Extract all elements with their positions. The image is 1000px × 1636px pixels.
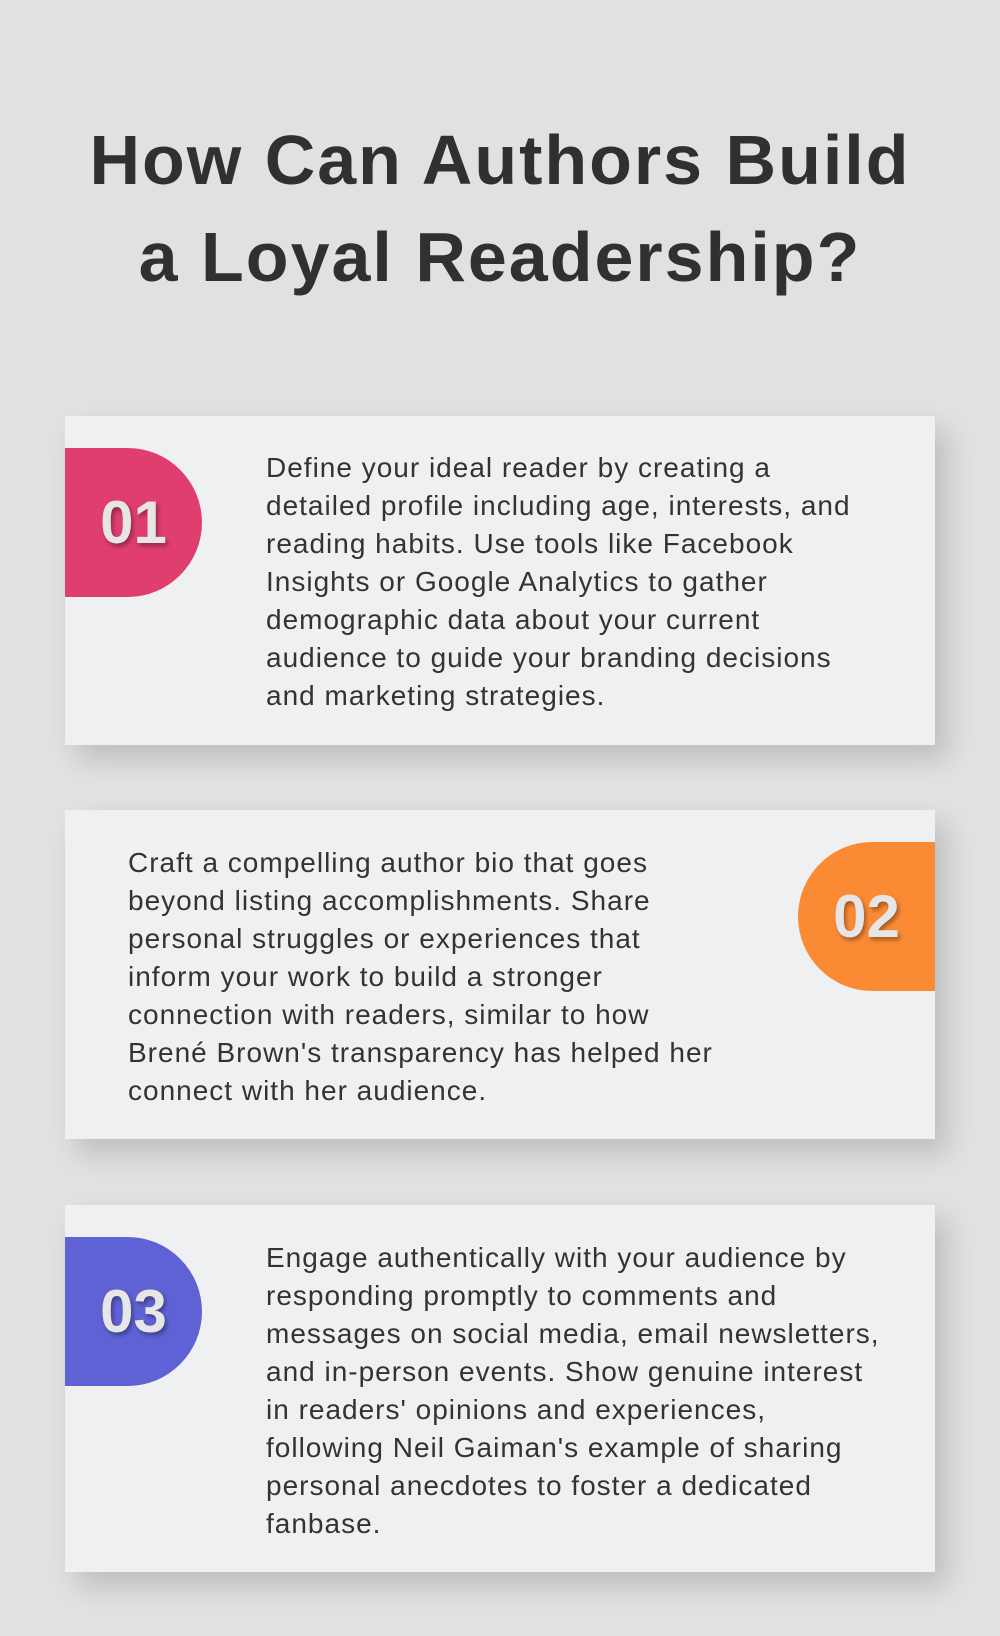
text: step 1: demographic data about your current [266,604,760,635]
text: step 3: messages on social media, email newsletters, [266,1318,880,1349]
text: step 1: Insights or Google Analytics to gather [266,566,768,597]
text: step 3: Engage authentically with your audience by [266,1242,847,1273]
panel: step 3 [65,1205,935,1572]
text: step 3: following Neil Gaiman's example of sharing [266,1432,842,1463]
text: step 2: Craft a compelling author bio that goes [128,847,648,878]
text: step 3: personal anecdotes to foster a dedicated [266,1470,812,1501]
text: step 1: Define your ideal reader by creating a [266,452,771,483]
text: step 2: beyond listing accomplishments. Share [128,885,651,916]
text: step 2: inform your work to build a stronger [128,961,603,992]
panel: step 2 [65,810,935,1139]
text: step 1: audience to guide your branding decisions [266,642,832,673]
text: step 3: fanbase. [266,1508,381,1539]
text: step 2 [128,847,713,1106]
badge: 01: 01 [100,489,167,556]
text: step 3: and in-person events. Show genuine interest [266,1356,863,1387]
text: step 3: responding promptly to comments and [266,1280,777,1311]
text: step 2: connect with her audience. [128,1075,487,1106]
text: step 3: in readers' opinions and experiences, [266,1394,766,1425]
text: step 1: detailed profile including age, interests, and [266,490,851,521]
text: step 1: reading habits. Use tools like Facebook [266,528,794,559]
badge: 01 [65,448,202,597]
text: step 2: connection with readers, similar to how [128,999,649,1030]
title: a Loyal Readership? [139,218,861,296]
badge: 03 [65,1237,202,1386]
text: step 2: Brené Brown's transparency has helped her [128,1037,713,1068]
text: step 1: and marketing strategies. [266,680,605,711]
panel: step 1 [65,416,935,745]
text: step 2: personal struggles or experiences that [128,923,641,954]
badge: 03: 03 [100,1278,167,1345]
text: step 3 [266,1242,880,1539]
text: step 1 [266,452,851,711]
badge: 02: 02 [833,883,900,950]
title: How Can Authors Build [89,121,911,199]
title [89,121,911,296]
badge: 02 [798,842,935,991]
